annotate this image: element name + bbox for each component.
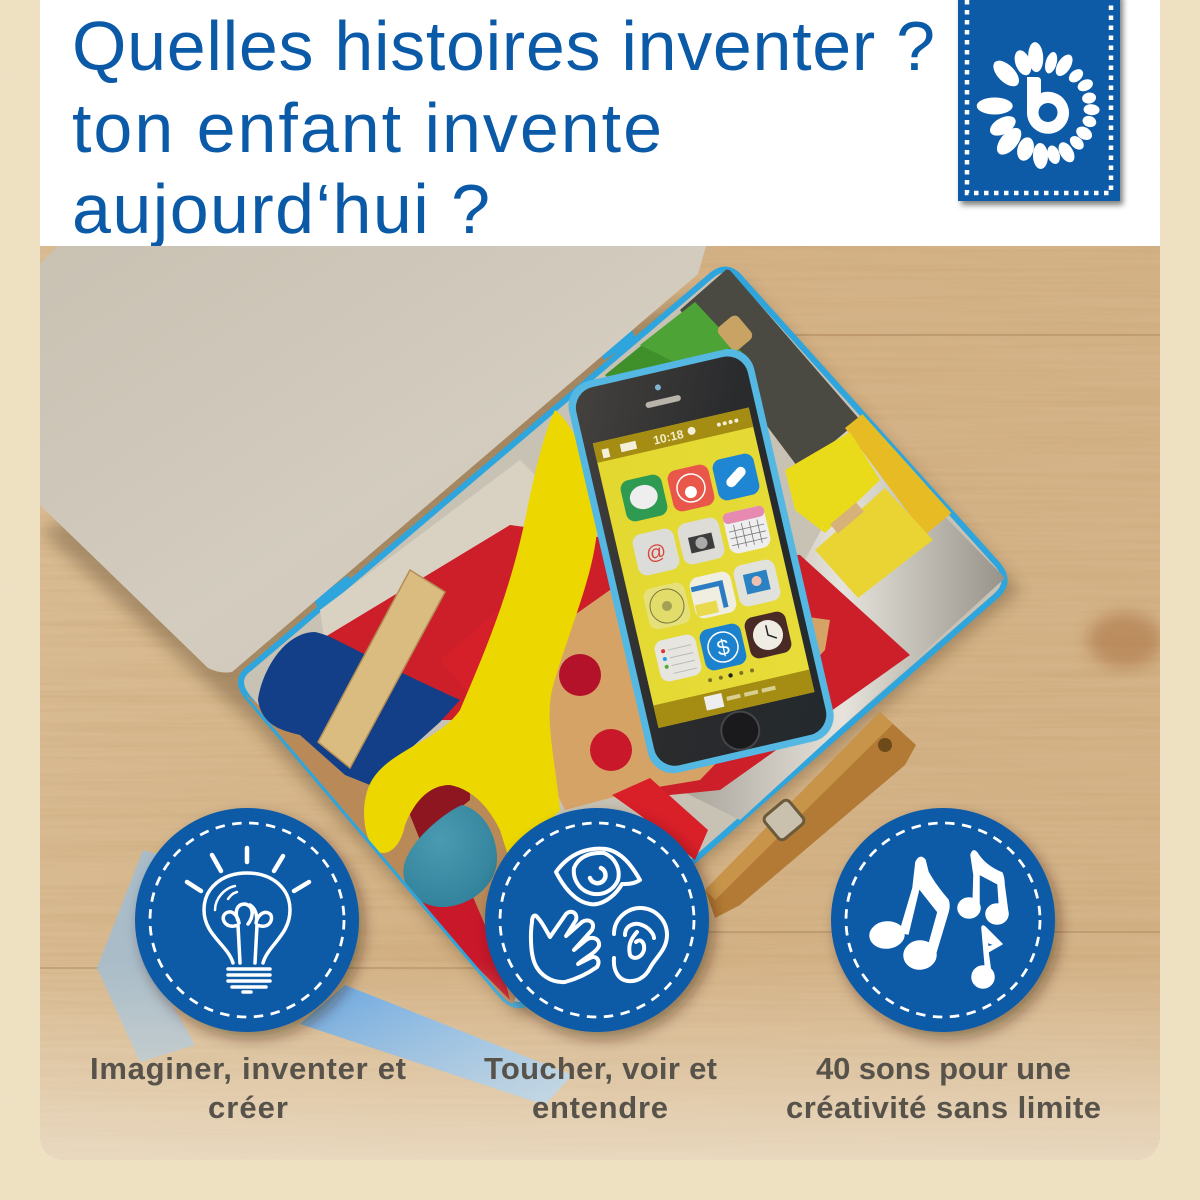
- strap with latch: [705, 712, 916, 918]
- badge: senses: [485, 808, 709, 1032]
- caption: imaginer: créer: [208, 1090, 288, 1125]
- hammer: blue handle: [300, 985, 572, 1105]
- red lower edge: [422, 898, 510, 1000]
- hammer: grey-blue head: [97, 850, 195, 1062]
- icon: music notes: [869, 851, 1008, 988]
- title: Quelles histoires inventer ?: [72, 7, 935, 85]
- silver right wall: [680, 440, 1005, 820]
- icon: eye, hand and ear: [531, 849, 667, 982]
- dark blue block: [258, 632, 460, 785]
- phone app icons: @: [644, 540, 669, 566]
- toy smartphone: [563, 344, 839, 778]
- yellow wrench: [364, 410, 597, 862]
- teal egg block: [403, 805, 497, 907]
- wood dowel: [718, 316, 752, 350]
- title: ton enfant invente: [72, 89, 662, 167]
- home button: [720, 710, 760, 750]
- caption: toucher: entendre: [532, 1090, 668, 1125]
- orange yellow block behind: [845, 408, 955, 535]
- icon: light bulb: [187, 848, 309, 992]
- yellow toy block 1: [785, 432, 880, 533]
- title: aujourd‘hui ?: [72, 170, 490, 248]
- title: [72, 7, 935, 248]
- badge: imagination: [135, 808, 359, 1032]
- caption: sons: 40 sons pour une: [816, 1051, 1071, 1086]
- caption: sons: créativité sans limite: [786, 1090, 1101, 1125]
- box interior corner dark: [680, 268, 860, 470]
- caption: imaginer: Imaginer, inventer et: [90, 1051, 406, 1086]
- caption: imaginer: [90, 1051, 406, 1125]
- caption: toucher: Toucher, voir et: [484, 1051, 717, 1086]
- badge: sounds: [831, 808, 1055, 1032]
- shadow of lid and box: [40, 280, 1020, 1020]
- open tin box: [240, 268, 1005, 1010]
- wood table: [40, 246, 1163, 1160]
- white header band: [40, 0, 1160, 250]
- caption: sons: [786, 1051, 1101, 1125]
- phone app icons: [619, 452, 793, 683]
- phone screen: [593, 407, 814, 728]
- wood plank with holes: [525, 590, 830, 810]
- logo flower: [977, 42, 1100, 169]
- open lid: [40, 246, 706, 672]
- red small block: [440, 609, 500, 692]
- red small pieces: [612, 778, 708, 860]
- phone app icons: $: [714, 634, 732, 661]
- phone screen: 10:18: [652, 427, 685, 448]
- logo letter b: [1027, 77, 1069, 134]
- logo tag: [958, 0, 1120, 201]
- wood floor area lower left: [245, 694, 516, 1004]
- yellow toy block 2: [815, 488, 933, 598]
- bottom white fade: [40, 960, 1160, 1160]
- wooden slat: [318, 570, 445, 768]
- photo: toy tool box on wood table: [40, 246, 1163, 1160]
- caption: toucher: [484, 1051, 717, 1125]
- red sheet upper: [320, 525, 910, 800]
- box latches: [314, 330, 636, 608]
- green block: [605, 302, 742, 377]
- dark red patch under wrench: [410, 785, 470, 838]
